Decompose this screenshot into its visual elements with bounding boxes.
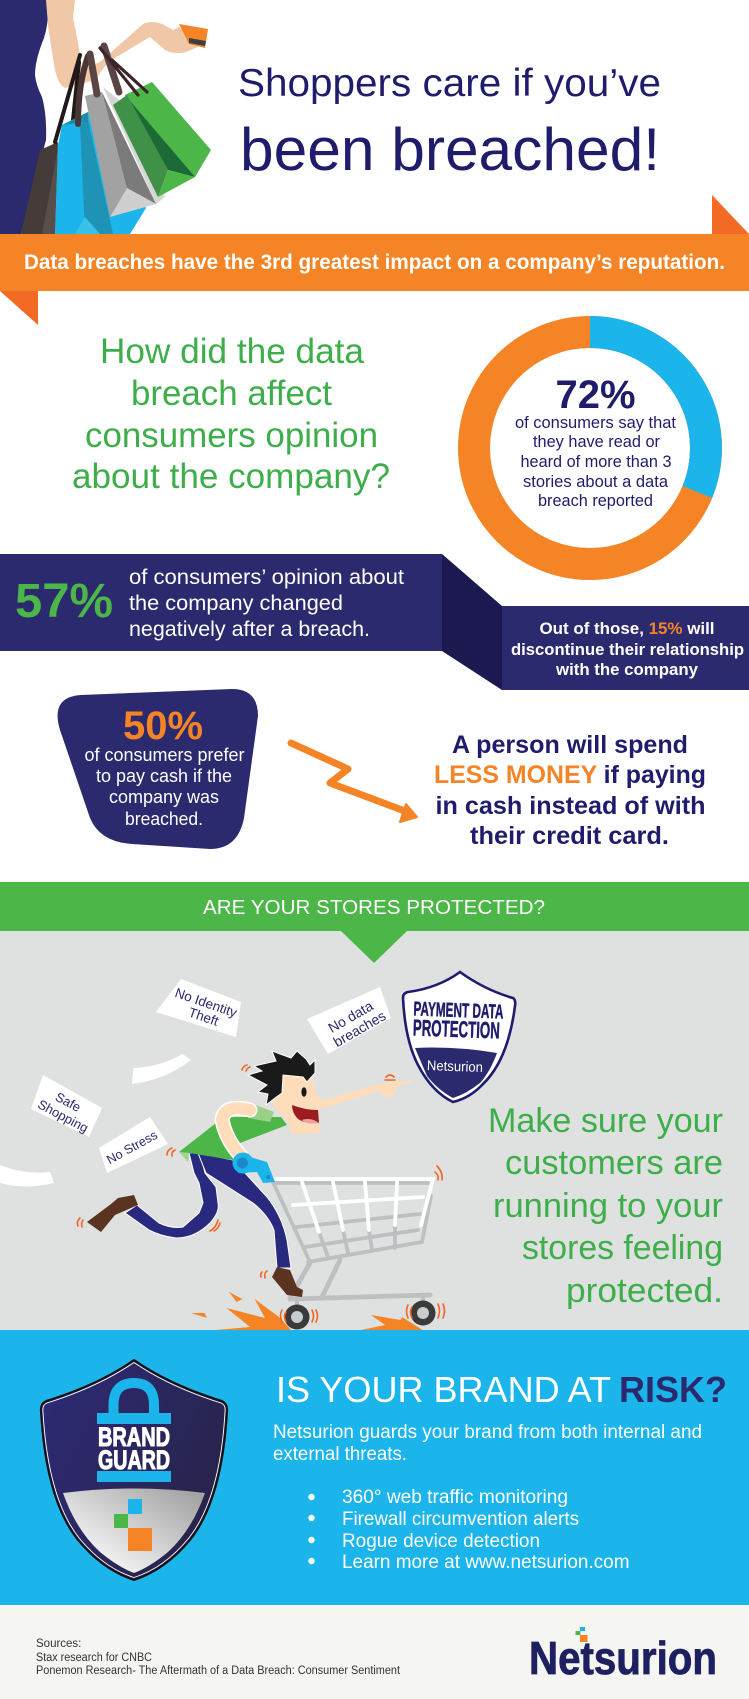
question heading	[72, 332, 390, 496]
text: less money: their credit card.	[470, 822, 669, 850]
illustration: running man with shopping cart	[77, 1051, 444, 1330]
green heading band: ARE YOUR STORES PROTECTED?	[203, 896, 545, 919]
donut chart: 72%: they have read or	[533, 433, 660, 451]
icon: brand guard shield	[41, 1360, 227, 1580]
legs and shoes	[87, 1153, 303, 1297]
donut chart: 72%: heard of more than 3	[520, 453, 672, 471]
text: less money: A person will spend	[452, 731, 688, 759]
sparks	[191, 1292, 423, 1330]
wheels	[284, 1300, 436, 1330]
paper: blank swoosh lower	[0, 1165, 54, 1186]
paper: no identity theft: No Identity	[173, 985, 239, 1020]
text: brand guard description	[273, 1422, 702, 1465]
donut chart: 72%: of consumers say that	[515, 414, 676, 432]
text: less money: in cash instead of with	[436, 792, 706, 820]
motion marks	[77, 1065, 444, 1322]
title: been breached!	[240, 116, 660, 183]
paper: no identity theft	[156, 979, 241, 1037]
text: brand guard description: Netsurion guards your brand from both internal and	[273, 1422, 702, 1443]
text: make sure: running to your	[493, 1187, 723, 1225]
text: make sure: stores feeling	[522, 1229, 723, 1267]
question heading: about the company?	[72, 457, 390, 496]
text: less money	[434, 731, 706, 850]
flying papers	[0, 979, 391, 1186]
heading: is your brand at risk: RISK?	[619, 1369, 727, 1410]
panel: 50% prefer cash: of consumers prefer	[84, 745, 244, 765]
text: make sure: Make sure your	[488, 1102, 723, 1140]
question heading: How did the data	[100, 332, 365, 371]
donut chart: 72%: 72%	[556, 373, 636, 417]
icon: payment data protection shield: PAYMENT DATA	[413, 998, 504, 1024]
paper: blank swoosh upper	[132, 1054, 191, 1084]
cart	[272, 1179, 433, 1312]
donut chart: 72%: breach reported	[538, 492, 653, 510]
icon: payment data protection shield: PROTECTION	[412, 1014, 500, 1043]
sources: Stax research for CNBC	[36, 1652, 152, 1664]
panel: 15% discontinue: discontinue their relationship	[511, 640, 744, 659]
panel: 57% opinion changed: of consumers’ opinion about	[129, 565, 404, 589]
text: make sure: customers are	[505, 1144, 723, 1182]
panel: 15% discontinue: with the company	[555, 660, 699, 679]
paper: safe shopping: Safe	[53, 1089, 83, 1115]
panel: 50% prefer cash: to pay cash if the	[96, 766, 232, 786]
paper: no data breaches: No data	[325, 997, 376, 1036]
sources: Sources:	[36, 1638, 81, 1650]
donut chart: 72%	[474, 332, 706, 564]
paper: no identity theft: Theft	[186, 1005, 221, 1029]
icon: payment data protection shield: Netsurion	[427, 1057, 483, 1075]
bullet list	[308, 1487, 630, 1573]
cart handle	[232, 1152, 275, 1183]
paper: no stress	[99, 1117, 168, 1173]
sources	[36, 1638, 401, 1677]
heading: is your brand at risk: IS YOUR BRAND AT	[276, 1369, 611, 1410]
bullet list: Firewall circumvention alerts	[342, 1509, 579, 1530]
panel: footer background	[0, 1605, 749, 1699]
text: make sure	[488, 1102, 723, 1310]
panel: blue brand risk section	[0, 1330, 749, 1605]
panel: 50% prefer cash: breached.	[125, 809, 203, 829]
panel: 57% opinion changed: negatively after a breach.	[129, 617, 370, 641]
sources: Ponemon Research- The Aftermath of a Data Breach: Consumer Sentiment	[36, 1665, 401, 1677]
text: less money: LESS MONEY if paying	[434, 761, 706, 789]
icon: brand guard shield: GUARD	[98, 1445, 170, 1475]
panel: 15% discontinue	[502, 606, 749, 690]
green heading band	[0, 882, 749, 963]
paper: no data breaches: breaches	[331, 1007, 388, 1050]
panel: 57% opinion changed: the company changed	[129, 591, 343, 615]
logo: Netsurion: Netsurion	[529, 1632, 717, 1684]
panel: 50% prefer cash: 50%	[123, 704, 203, 748]
bullet list: Learn more at www.netsurion.com	[342, 1552, 630, 1573]
arrow	[291, 743, 417, 822]
panel: grey protection section background	[0, 931, 749, 1330]
panel: 57% opinion changed: 57%	[15, 575, 113, 628]
panel: 57% opinion changed	[0, 554, 502, 690]
title	[238, 62, 661, 183]
donut chart: 72%: stories about a data	[523, 473, 669, 491]
icon: brand guard shield: BRAND	[98, 1422, 170, 1452]
question heading: consumers opinion	[85, 416, 378, 455]
illustration: hand with credit card holding shopping bags	[0, 0, 211, 234]
text: make sure: protected.	[566, 1272, 723, 1310]
icon: payment data protection shield	[403, 972, 515, 1102]
panel: 50% prefer cash	[58, 689, 258, 849]
bullet list: Rogue device detection	[342, 1531, 540, 1552]
ribbon banner: Data breaches have the 3rd greatest impact on a company’s reputation.	[24, 250, 725, 274]
paper: no stress: No Stress	[104, 1128, 160, 1167]
ribbon banner	[0, 195, 749, 325]
body and arms	[179, 1080, 415, 1162]
paper: safe shopping: Shopping	[35, 1097, 91, 1136]
paper: safe shopping	[31, 1075, 102, 1137]
head	[248, 1051, 323, 1134]
panel: 15% discontinue: Out of those, 15% will	[540, 619, 714, 638]
paper: no data breaches	[307, 987, 391, 1054]
question heading: breach affect	[131, 374, 332, 413]
panel: 50% prefer cash: company was	[109, 787, 219, 807]
text: brand guard description: external threats.	[273, 1444, 407, 1465]
title: Shoppers care if you’ve	[238, 62, 661, 105]
bullet list: 360° web traffic monitoring	[342, 1487, 568, 1508]
